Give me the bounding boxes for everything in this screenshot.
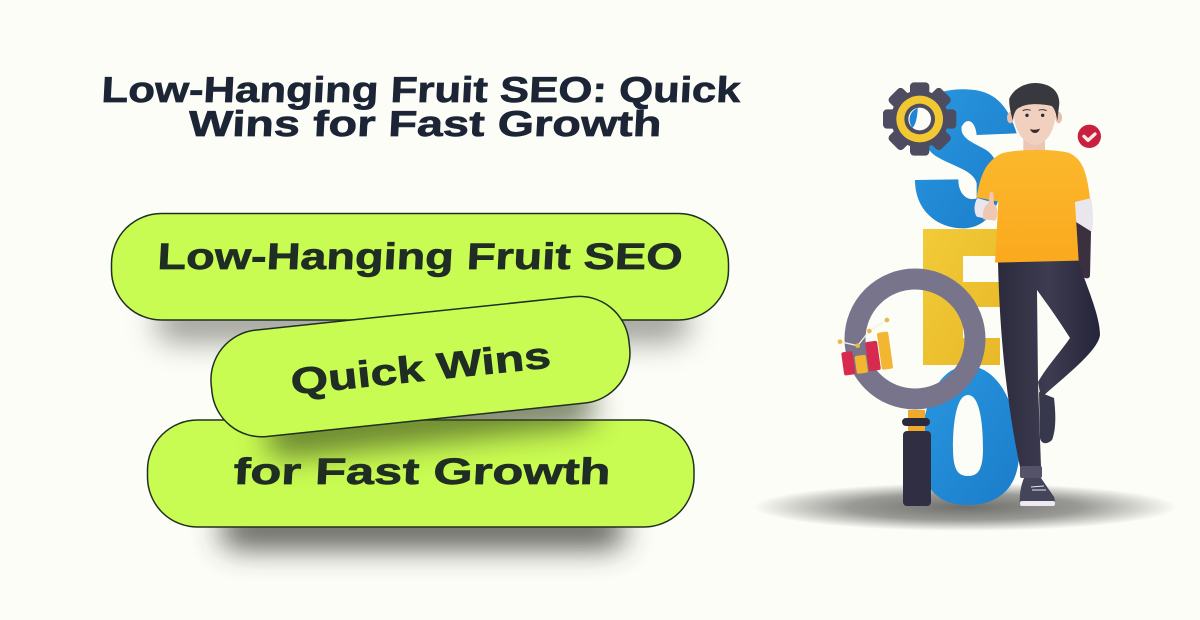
shadow: top pill (155, 302, 690, 342)
pill: Quick Wins: Quick Wins (289, 335, 553, 403)
pill: for Fast Growth (148, 420, 694, 527)
title: Wins for Fast Growth (188, 103, 663, 144)
face (1013, 103, 1056, 145)
neck (1023, 135, 1045, 155)
shadow: tilted pill (265, 384, 597, 458)
hair (1009, 83, 1059, 121)
pill: Quick Wins (206, 291, 635, 442)
title: Low-Hanging Fruit SEO: Quick (101, 69, 743, 110)
ground shadow (753, 483, 1177, 531)
trousers (998, 260, 1100, 467)
pill: Low-Hanging Fruit SEO: Low-Hanging Fruit SEO (157, 235, 684, 277)
back foot (1039, 392, 1055, 443)
letter S (883, 82, 1017, 228)
left sleeve and hand (974, 198, 990, 219)
magnifier ring (855, 279, 975, 399)
sleeve: right arm (1075, 198, 1093, 232)
letter O (921, 366, 1019, 505)
magnifier handle (902, 410, 931, 506)
eyes and mouth (1023, 110, 1047, 133)
letter E (923, 229, 1000, 365)
title (101, 69, 743, 144)
shadow: bottom pill (220, 512, 625, 548)
tablet (1075, 219, 1091, 278)
shirt (977, 150, 1090, 263)
pill: Low-Hanging Fruit SEO (112, 214, 728, 320)
illustration: SEO character (838, 82, 1101, 506)
icon: gear (883, 82, 956, 156)
ears (1007, 112, 1014, 123)
icon: mini bar chart (838, 318, 893, 376)
cuff (1020, 466, 1042, 478)
pill: for Fast Growth: for Fast Growth (233, 450, 612, 492)
upper body (974, 83, 1101, 263)
shoe (1020, 478, 1055, 506)
icon: red check badge (1078, 125, 1101, 148)
